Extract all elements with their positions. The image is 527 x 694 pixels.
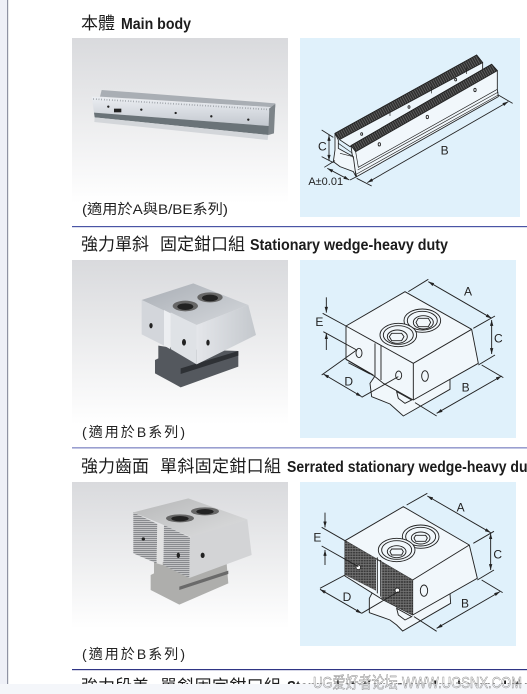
diagram: main body rail: B xyxy=(441,144,449,158)
panel: main body photo xyxy=(72,38,288,226)
panel: serrated wedge photo xyxy=(72,482,288,662)
heading: stepped wedge (clipped) xyxy=(82,677,527,684)
caption: (適用於B系列) xyxy=(82,424,185,440)
heading: main body xyxy=(81,14,191,33)
diagram: stationary wedge: E xyxy=(315,315,323,329)
bottom bar xyxy=(0,684,527,694)
diagram: stationary wedge: D xyxy=(344,375,353,389)
diagram: serrated wedge: E xyxy=(313,530,321,544)
diagram: main body rail: A±0.01 xyxy=(308,176,343,188)
photo: main body rail xyxy=(92,90,275,140)
panel: stationary wedge photo xyxy=(72,260,288,447)
caption: (適用於B系列) xyxy=(82,646,185,662)
photo: stationary wedge xyxy=(142,283,256,387)
diagram: main body rail xyxy=(308,55,513,188)
heading: stationary wedge: Stationary wedge-heavy duty xyxy=(250,237,448,254)
panel: serrated wedge dimensions xyxy=(300,482,516,646)
heading: stationary wedge xyxy=(81,235,448,254)
divider 3 xyxy=(72,669,527,670)
heading: stationary wedge: 強力單斜 xyxy=(81,235,149,254)
photo: serrated wedge xyxy=(133,498,252,605)
heading: main body: Main body xyxy=(121,16,191,33)
diagram: serrated wedge xyxy=(313,493,503,631)
diagram: main body rail: C xyxy=(318,139,327,153)
left margin strip xyxy=(0,0,8,694)
heading: serrated wedge: 單斜固定鉗口組 xyxy=(160,457,281,476)
heading: serrated wedge xyxy=(81,457,527,476)
divider 2 xyxy=(72,447,527,449)
diagram: stationary wedge: A xyxy=(464,285,472,299)
panel: stationary wedge dimensions xyxy=(300,260,516,438)
diagram: serrated wedge: D xyxy=(343,590,352,604)
divider 1 xyxy=(72,226,527,227)
diagram: stationary wedge: B xyxy=(462,381,470,395)
diagram: stationary wedge xyxy=(315,279,503,416)
panel: main body dimensions xyxy=(300,38,520,217)
diagram: stationary wedge: C xyxy=(494,331,503,345)
heading: stationary wedge: 固定鉗口組 xyxy=(160,235,245,254)
heading: serrated wedge: 強力齒面 xyxy=(81,457,149,476)
heading: main body: 本體 xyxy=(81,14,115,33)
diagram: serrated wedge: B xyxy=(461,597,469,611)
diagram: serrated wedge: C xyxy=(493,547,502,561)
caption: (適用於A與B/BE系列) xyxy=(82,201,228,217)
diagram: serrated wedge: A xyxy=(457,500,465,514)
